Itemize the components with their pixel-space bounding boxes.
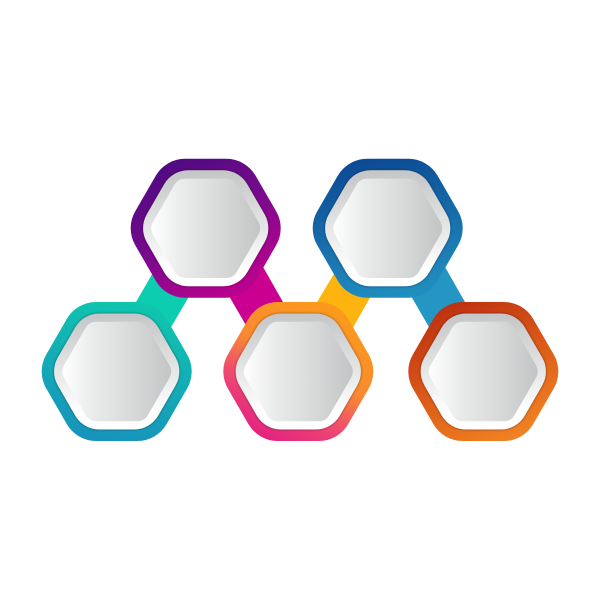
hexagon: blue top right — [345, 191, 430, 266]
hexagon: red-orange bottom right — [441, 334, 526, 409]
hexagon: teal bottom left — [74, 334, 159, 409]
connector: blue — [400, 244, 478, 353]
hexagon: orange-pink bottom middle — [256, 334, 341, 409]
connector: yellow — [307, 252, 383, 345]
connector: magenta — [218, 244, 296, 353]
connector: teal — [125, 252, 201, 346]
hexagon: purple top left — [163, 191, 248, 266]
